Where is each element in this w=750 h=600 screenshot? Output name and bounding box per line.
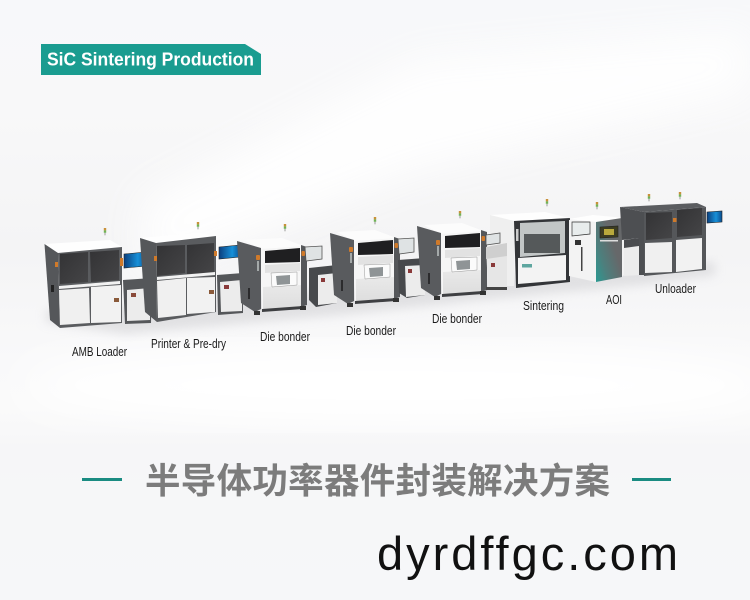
floor shadow under machines — [46, 262, 715, 334]
label: Die bonder 2: Die bonder — [346, 323, 397, 338]
label: AOI: AOI — [606, 292, 622, 307]
machine: Die bonder 1 — [237, 224, 307, 315]
cabinet and monitor: Die bonder 3 — [486, 233, 507, 290]
label: Die bonder 3: Die bonder — [432, 311, 483, 326]
machine: Die bonder 2 — [330, 217, 400, 307]
machine: AMB Loader — [44, 228, 122, 328]
cabinet and monitor: Printer and Pre-dry — [217, 245, 243, 315]
machine: Die bonder 3 — [417, 211, 487, 300]
label: Die bonder 1: Die bonder — [260, 329, 311, 344]
machine: AOI — [569, 202, 625, 282]
station labels — [72, 281, 697, 359]
label: Sintering: Sintering — [523, 298, 564, 313]
badge: SiC Sintering Production: SiC Sintering Production — [47, 50, 254, 70]
website address: dyrdffgc.com — [377, 527, 678, 580]
cabinet and monitor: AMB Loader — [120, 252, 152, 324]
cabinet and monitor: Die bonder 2 — [398, 238, 425, 298]
label: AMB Loader: AMB Loader — [72, 344, 128, 359]
label: Printer and Pre-dry: Printer & Pre-dry — [151, 336, 226, 351]
machine: Sintering — [490, 199, 570, 288]
machine: Printer and Pre-dry — [140, 222, 217, 322]
production line machines — [44, 192, 722, 328]
badge: SiC Sintering Production — [41, 44, 261, 75]
label: Unloader: Unloader — [655, 281, 697, 296]
machine: Unloader — [620, 192, 722, 276]
cabinet and monitor: Die bonder 1 — [305, 246, 337, 307]
heading with side rules: 半导体功率器件封装解决方案 — [145, 461, 610, 501]
